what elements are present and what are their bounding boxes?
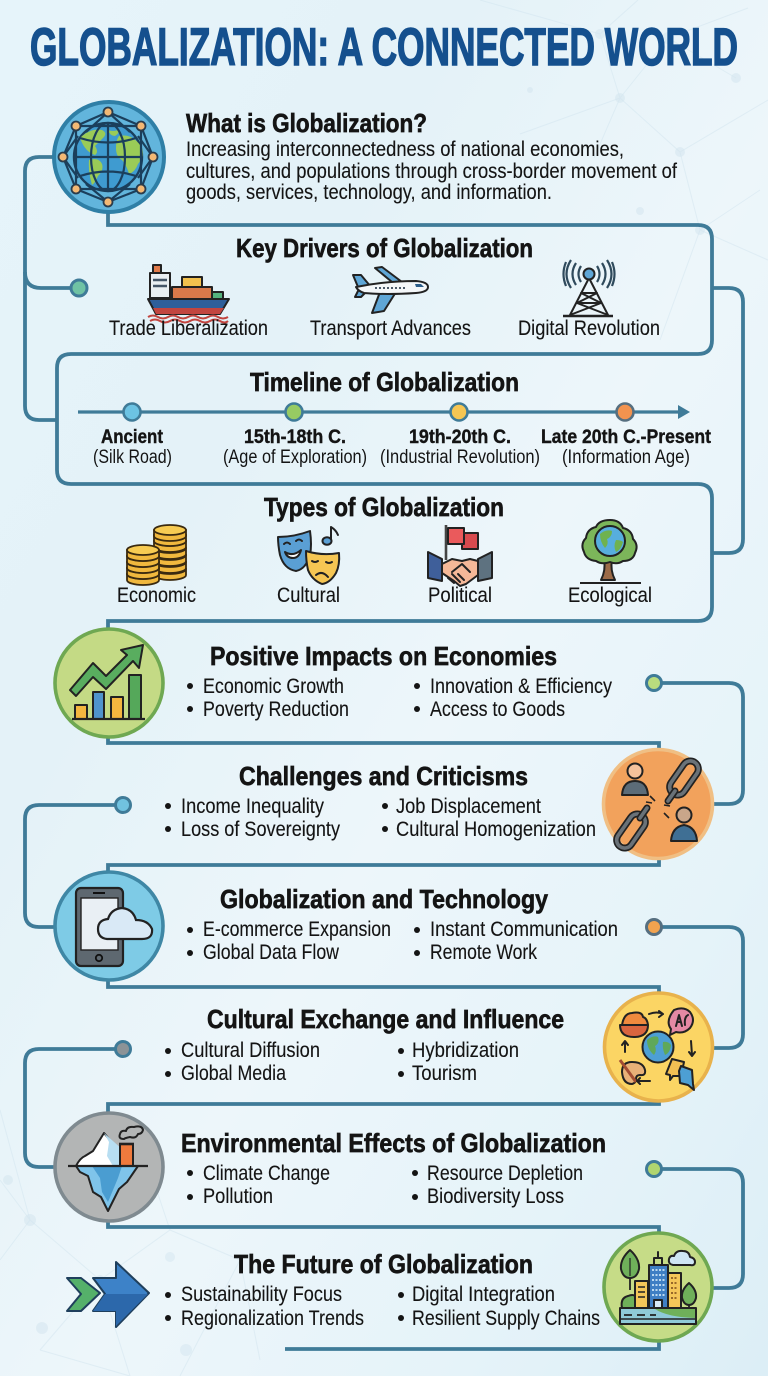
era: exploration [223, 426, 367, 468]
icon: theatre masks [278, 527, 339, 584]
label: Ecological [568, 584, 652, 607]
bullet list right: Hybridization [412, 1039, 519, 1062]
bullet list left [165, 795, 340, 841]
node: lime [646, 1162, 662, 1176]
timeline axis [78, 404, 690, 420]
panel: positive impacts [55, 629, 612, 737]
heading: Challenges and Criticisms [239, 761, 528, 791]
icon: networked globe [54, 102, 164, 212]
label: Cultural [277, 584, 340, 607]
bullet list left: Economic Growth [203, 675, 344, 698]
era: ancient [93, 426, 172, 468]
bullet list left: Income Inequality [181, 795, 324, 818]
bullet list left: Loss of Sovereignty [181, 818, 340, 841]
panel: environmental effects [55, 1113, 606, 1221]
bullet list left: Climate Change [203, 1162, 330, 1185]
bullet list right [414, 675, 612, 721]
bullet list left [165, 1283, 364, 1330]
era: exploration: 15th-18th C. [244, 426, 346, 448]
heading: Cultural Exchange and Influence [207, 1004, 564, 1034]
bullet list left: Global Media [181, 1062, 286, 1085]
bullet list right [398, 1039, 519, 1085]
icon: sustainable city [604, 1233, 712, 1341]
heading: What is Globalization? [186, 108, 427, 138]
era: ancient: Ancient [101, 426, 163, 448]
heading: Types of Globalization [264, 492, 504, 522]
icon: phone and cloud [55, 872, 163, 980]
node: blue [116, 798, 130, 812]
bullet list left: Global Data Flow [203, 941, 340, 964]
node: teal [71, 280, 87, 296]
bullet list left [187, 1162, 330, 1208]
panel: challenges [165, 750, 712, 858]
icon: radio tower [563, 260, 614, 316]
heading: Globalization and Technology [220, 884, 548, 914]
bullet list right: Innovation & Efficiency [430, 675, 612, 698]
label: Digital Revolution [518, 317, 660, 340]
panel: types [117, 492, 652, 607]
icon: cultural exchange cycle [604, 993, 712, 1101]
panel: cultural exchange [165, 993, 712, 1101]
era: information: (Information Age) [562, 447, 690, 468]
heading: Positive Impacts on Economies [210, 641, 557, 671]
bullet list right: Remote Work [430, 941, 537, 964]
heading: Environmental Effects of Globalization [181, 1128, 606, 1158]
heading: Timeline of Globalization [250, 367, 519, 397]
bullet list right: Access to Goods [430, 698, 565, 721]
bullet list right: Biodiversity Loss [427, 1185, 564, 1208]
bullet list right: Tourism [412, 1062, 477, 1085]
panel: timeline [78, 367, 711, 468]
era: information [541, 426, 711, 468]
bullet list right: Digital Integration [412, 1283, 555, 1306]
heading: Key Drivers of Globalization [236, 233, 533, 263]
era: information: Late 20th C.-Present [541, 426, 711, 448]
bullet list left: Poverty Reduction [203, 698, 349, 721]
icon: iceberg and chimney [55, 1113, 163, 1221]
era: industrial [380, 426, 540, 468]
icon: growth chart [55, 629, 163, 737]
bullet list left [187, 918, 391, 964]
definition text: Increasing interconnectedness of national economies, [186, 138, 624, 161]
label: Trade Liberalization [109, 317, 268, 340]
bullet list right: Resilient Supply Chains [412, 1307, 600, 1330]
bullet list right [412, 1162, 583, 1208]
definition text: cultures, and populations through cross-border movement of [186, 160, 677, 183]
label: Political [428, 584, 492, 607]
bullet list right [414, 918, 618, 964]
bullet list right: Resource Depletion [427, 1162, 583, 1185]
bullet list right: Instant Communication [430, 918, 618, 941]
icon: forward arrows [67, 1262, 149, 1327]
era: ancient: (Silk Road) [93, 447, 172, 468]
bullet list right: Cultural Homogenization [396, 818, 596, 841]
bullet list right: Job Displacement [396, 795, 541, 818]
panel: future [67, 1233, 712, 1341]
bullet list left: Regionalization Trends [181, 1307, 364, 1330]
label: Transport Advances [310, 317, 471, 340]
panel: key drivers [109, 233, 660, 340]
definition text [186, 138, 677, 204]
icon: airplane [353, 267, 428, 313]
icon: cargo ship [148, 265, 229, 322]
node: light green [646, 676, 662, 690]
bullet list left: Sustainability Focus [181, 1283, 342, 1306]
icon: tree with globe [580, 520, 641, 583]
node: orange [646, 920, 662, 934]
era: exploration: (Age of Exploration) [223, 447, 367, 468]
bullet list right [398, 1283, 600, 1330]
bullet list right [382, 795, 596, 841]
bullet list left: Cultural Diffusion [181, 1039, 320, 1062]
bullet list left [165, 1039, 320, 1085]
era: industrial: (Industrial Revolution) [380, 447, 540, 468]
bullet list left: Pollution [203, 1185, 273, 1208]
icon: coins [127, 525, 186, 585]
era: industrial: 19th-20th C. [409, 426, 511, 448]
icon: handshake with flags [428, 525, 492, 586]
icon: broken chain and people [604, 750, 712, 858]
bullet list left: E-commerce Expansion [203, 918, 391, 941]
label: Economic [117, 584, 196, 607]
panel: technology [55, 872, 618, 980]
node: grey [116, 1042, 130, 1056]
panel: what is globalization [54, 102, 677, 212]
heading: The Future of Globalization [234, 1249, 533, 1279]
definition text: goods, services, technology, and information. [186, 181, 552, 204]
bullet list left [187, 675, 349, 721]
